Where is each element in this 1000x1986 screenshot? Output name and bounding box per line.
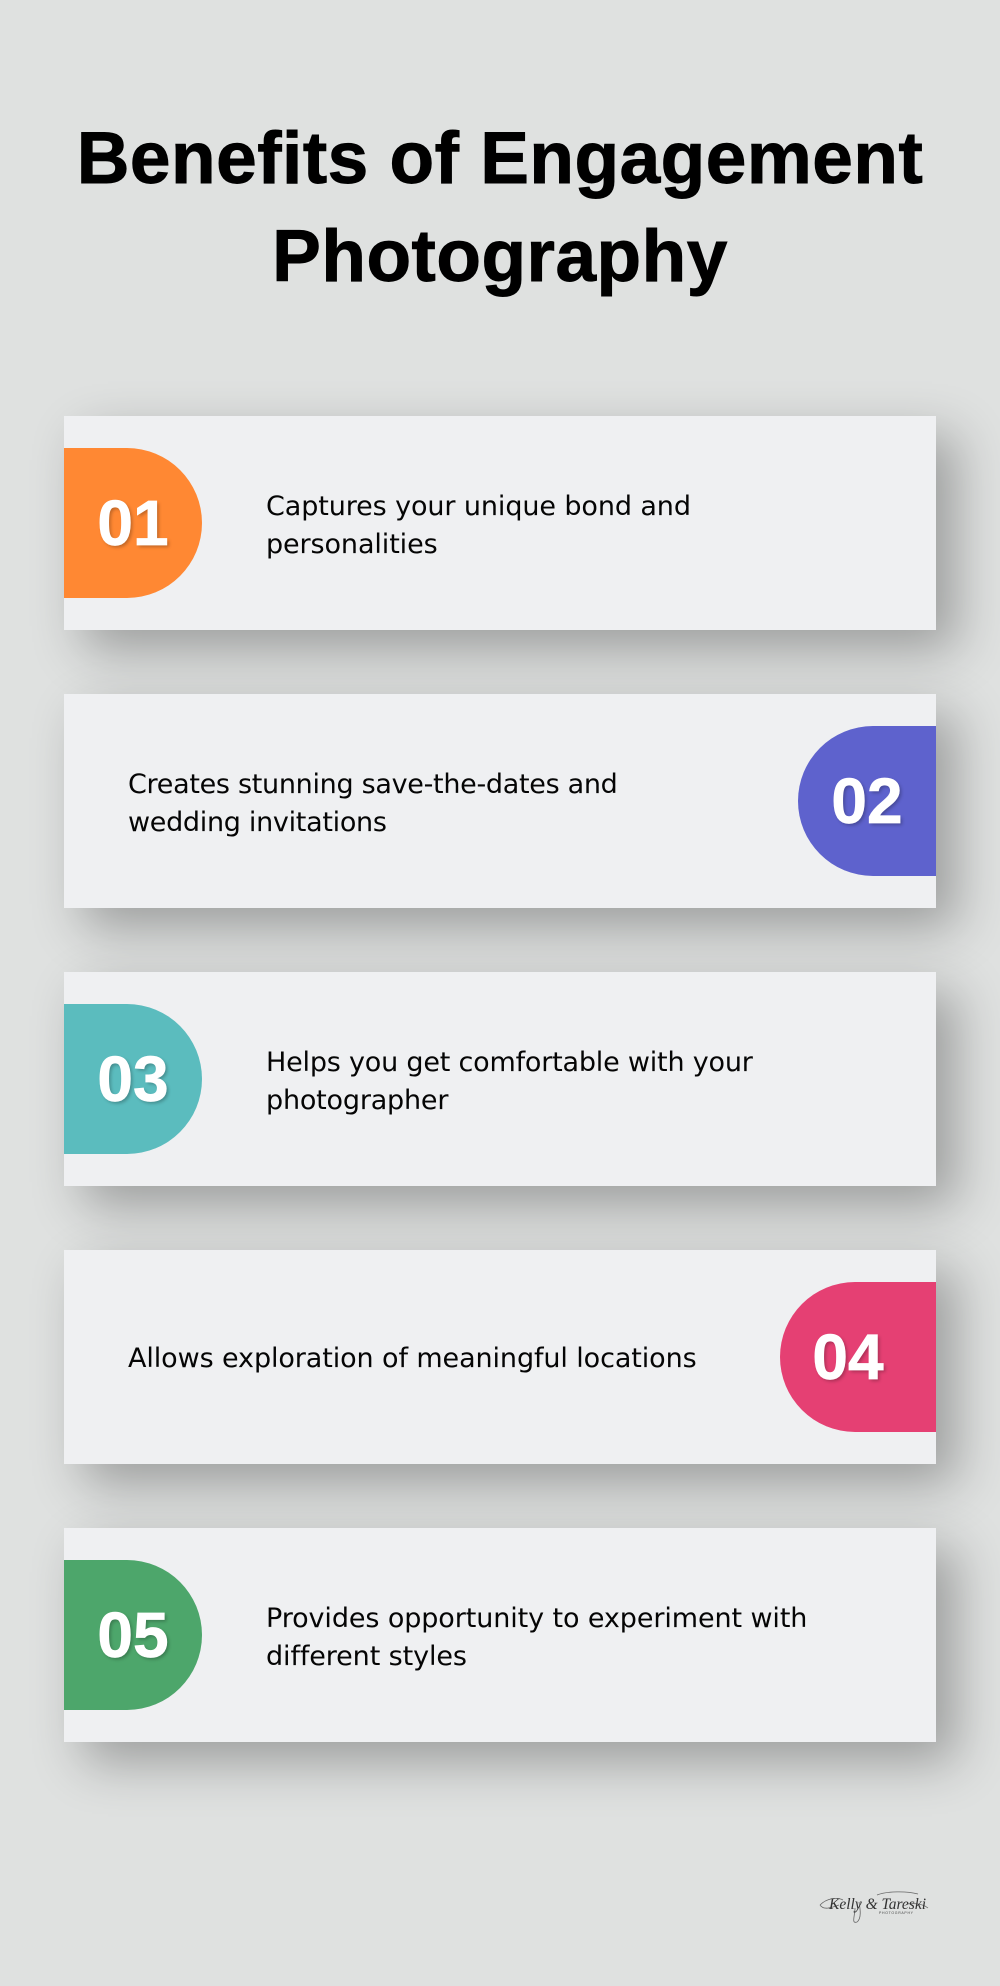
benefit text 01: [266, 491, 691, 560]
benefit text 02: [128, 769, 618, 838]
benefit text 05: Provides opportunity to experiment with: [266, 1603, 807, 1634]
panel: benefit 05: [64, 1528, 936, 1742]
benefit text 05: different styles: [266, 1641, 467, 1672]
number badge 04: 04: [812, 1321, 884, 1393]
logo: Kelly & Tareski Photography signature: [820, 1892, 928, 1923]
benefit text 04: Allows exploration of meaningful locations: [128, 1343, 697, 1374]
title: Benefits of Engagement: [77, 118, 923, 199]
number badge 01: [64, 448, 202, 598]
number badge 02: 02: [831, 765, 903, 837]
number badge 05: 05: [97, 1599, 169, 1671]
benefit text 05: [266, 1603, 807, 1672]
panel: benefit 01: [64, 416, 936, 630]
benefit text 01: personalities: [266, 529, 438, 560]
number badge 02: [798, 726, 936, 876]
logo: Kelly & Tareski Photography signature: Kelly & Tareski: [828, 1896, 926, 1913]
number badge 01: 01: [97, 487, 169, 559]
number badge 03: 03: [97, 1043, 169, 1115]
title: [77, 118, 923, 297]
benefit text 03: Helps you get comfortable with your: [266, 1047, 753, 1078]
number badge 04: [780, 1282, 936, 1432]
benefit text 02: wedding invitations: [128, 807, 387, 838]
benefit text 03: [266, 1047, 753, 1116]
panel: benefit 03: [64, 972, 936, 1186]
logo: Kelly & Tareski Photography signature: PHOTOGRAPHY: [879, 1911, 914, 1915]
panel: benefit 02: [64, 694, 936, 908]
number badge 05: [64, 1560, 202, 1710]
panel: benefit 04: [64, 1250, 936, 1464]
benefit text 01: Captures your unique bond and: [266, 491, 691, 522]
number badge 03: [64, 1004, 202, 1154]
title: Photography: [272, 216, 728, 297]
benefit text 03: photographer: [266, 1085, 448, 1116]
benefit text 02: Creates stunning save-the-dates and: [128, 769, 618, 800]
